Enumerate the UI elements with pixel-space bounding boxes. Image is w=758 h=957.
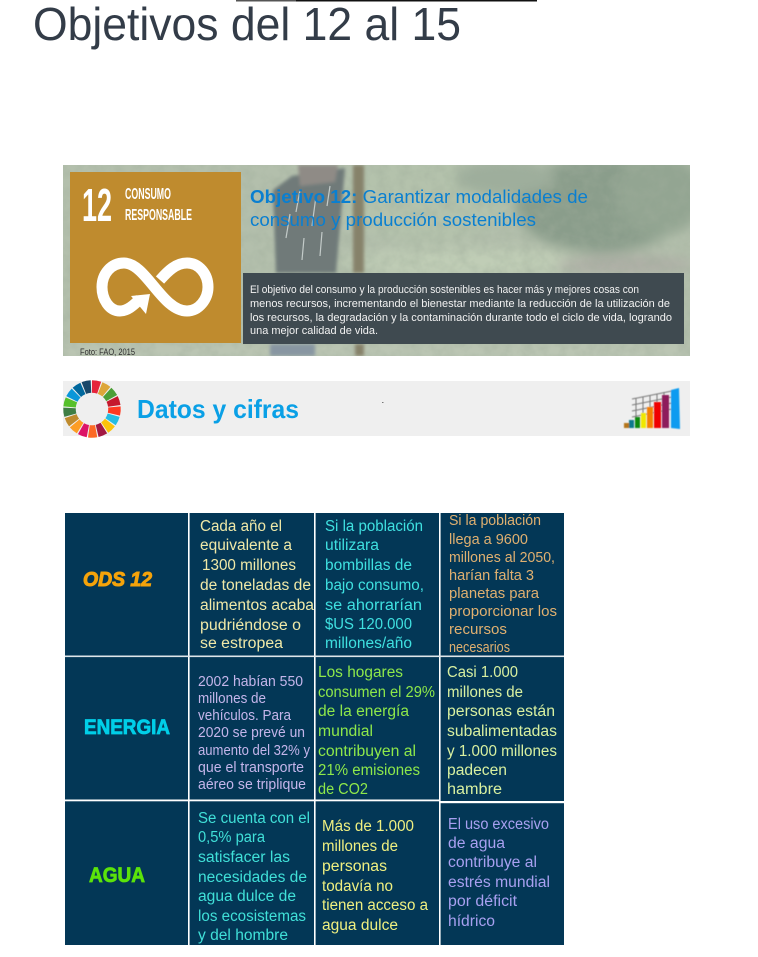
cell: energia hogares: [318, 664, 435, 798]
cell: ods 12 bombillas: bajo consumo,: [325, 577, 424, 594]
cell: energia hambre: personas están: [447, 703, 555, 720]
band heading: Datos y cifras: [137, 394, 299, 424]
cell: ods 12 planetas: planetas para: [449, 586, 540, 602]
top rule: [236, 0, 537, 2]
cell: energia hambre: y 1.000 millones: [447, 743, 557, 760]
cell: ods 12 bombillas: bombillas de: [325, 557, 412, 574]
description box: [243, 273, 684, 344]
cell: agua acceso: Más de 1.000: [322, 818, 414, 835]
cell: ods 12 bombillas: Si la población: [325, 518, 423, 535]
cell: agua estres: por déficit: [448, 893, 518, 910]
cell: ods 12 planetas: Si la población: [449, 513, 541, 529]
cell: ods 12 alimentos: [200, 518, 314, 652]
cell: agua estres: [448, 816, 550, 930]
cell: agua acceso: tienen acceso a: [322, 897, 428, 914]
cell: ods 12 bombillas: utilizara: [325, 537, 379, 554]
cell: agua estres: El uso excesivo: [448, 816, 549, 833]
panel: datos y cifras band: [60, 377, 690, 441]
cell: ods 12 alimentos: de toneladas de: [200, 577, 311, 594]
cell: energia hambre: hambre: [447, 781, 502, 798]
cell: energia hogares: de CO2: [318, 781, 368, 798]
cell: ods 12 bombillas: se ahorrarían: [325, 597, 422, 614]
icon: 3D bar chart: [624, 388, 680, 429]
cell: ods 12 planetas: necesarios: [449, 640, 510, 656]
description box: menos recursos, incrementando el bienestar mediante la reducción de la utilización de: [250, 298, 670, 310]
cell: energia hogares: Los hogares: [318, 664, 403, 681]
goal name: RESPONSABLE: [125, 207, 192, 224]
cell: energia hogares: de la energía: [318, 703, 409, 720]
cell: agua estres: contribuye al: [448, 854, 537, 871]
cell: agua acceso: personas: [322, 858, 387, 875]
cell: energia hogares: mundial: [318, 723, 373, 740]
cell: ENERGIA label: ENERGIA: [84, 716, 170, 739]
description box: los recursos, la degradación y la contaminación durante todo el ciclo de vida, logrando: [250, 312, 672, 324]
data table: [65, 513, 564, 945]
cell: energia vehiculos: aumento del 32% y: [198, 743, 311, 759]
description box: El objetivo del consumo y la producción sostenibles es hacer más y mejores cosas con: [250, 284, 639, 296]
cell: ods 12 alimentos: Cada año el: [200, 518, 282, 535]
cell: ods 12 alimentos: equivalente a: [200, 537, 292, 554]
cell: agua ecosistemas: necesidades de: [198, 869, 307, 886]
cell: energia vehiculos: vehículos. Para: [198, 708, 292, 724]
table background: [65, 513, 564, 945]
cell: agua acceso: [322, 818, 428, 934]
cell: AGUA label: AGUA: [89, 864, 145, 887]
cell: energia hambre: Casi 1.000: [447, 664, 518, 681]
goal name: CONSUMO: [125, 186, 171, 203]
cell: agua acceso: agua dulce: [322, 917, 398, 934]
goal 12 tile: [70, 172, 241, 343]
cell: ods 12 planetas: recursos: [449, 622, 507, 638]
cell: energia vehiculos: [198, 674, 311, 793]
cell: energia hambre: padecen: [447, 762, 507, 779]
goal number: 12: [82, 179, 112, 231]
cell: agua estres: hídrico: [448, 913, 495, 930]
icon: SDG colour wheel: [60, 377, 124, 441]
cell: energia hambre: [447, 664, 557, 798]
cell: ods 12 alimentos: pudriéndose o: [200, 617, 301, 634]
icon: infinity loop arrow: [102, 263, 208, 314]
cell: energia vehiculos: 2020 se prevé un: [198, 725, 305, 741]
cell: ods 12 alimentos: se estropea: [200, 635, 283, 652]
cell: agua ecosistemas: [198, 810, 310, 944]
cell: agua ecosistemas: agua dulce de: [198, 888, 296, 905]
cell: ods 12 planetas: harían falta 3: [449, 568, 534, 584]
cell: agua acceso: todavía no: [322, 878, 393, 895]
cell: agua ecosistemas: 0,5% para: [198, 829, 265, 846]
cell: agua ecosistemas: y del hombre: [198, 927, 288, 944]
cell: ODS 12 label: ODS 12: [83, 569, 152, 591]
cell: energia vehiculos: aéreo se triplique: [198, 777, 306, 793]
cell: ods 12 bombillas: millones/año: [325, 635, 412, 652]
cell: ods 12 bombillas: $US 120.000: [325, 616, 412, 633]
cell: energia vehiculos: 2002 habían 550: [198, 674, 303, 690]
cell: ods 12 alimentos: alimentos acaba: [200, 597, 314, 614]
cell: energia hogares: contribuyen al: [318, 743, 416, 760]
cell: agua ecosistemas: satisfacer las: [198, 849, 290, 866]
cell: agua estres: estrés mundial: [448, 874, 550, 891]
cell: ods 12 planetas: millones al 2050,: [449, 550, 555, 566]
cell: agua ecosistemas: Se cuenta con el: [198, 810, 310, 827]
cell: ods 12 alimentos: 1300 millones: [202, 557, 296, 574]
panel: objetivo 12 banner: [63, 155, 705, 357]
cell: energia hambre: millones de: [447, 684, 523, 701]
banner photo background: [63, 155, 705, 356]
description box: una mejor calidad de vida.: [250, 325, 378, 337]
objective heading: Objetivo 12: Garantizar modalidades de: [250, 187, 588, 207]
objective heading: [250, 187, 588, 230]
cell: energia vehiculos: que el transporte: [198, 760, 304, 776]
cell: ods 12 planetas: llega a 9600: [449, 532, 528, 548]
cell: ods 12 bombillas: [325, 518, 424, 652]
cell: agua acceso: millones de: [322, 838, 398, 855]
cell: energia hogares: 21% emisiones: [318, 762, 420, 779]
objective heading: consumo y producción sostenibles: [250, 210, 536, 230]
small dot: [382, 402, 384, 403]
cell: ods 12 planetas: [449, 513, 557, 656]
cell: agua ecosistemas: los ecosistemas: [198, 908, 306, 925]
cell: energia hogares: consumen el 29%: [318, 684, 435, 701]
cell: energia vehiculos: millones de: [198, 691, 266, 707]
cell: agua estres: de agua: [448, 835, 505, 852]
photo credit: Foto: FAO, 2015: [80, 347, 135, 357]
cell: energia hambre: subalimentadas: [447, 723, 557, 740]
cell: ods 12 planetas: proporcionar los: [449, 604, 557, 620]
goal name: [125, 186, 192, 224]
